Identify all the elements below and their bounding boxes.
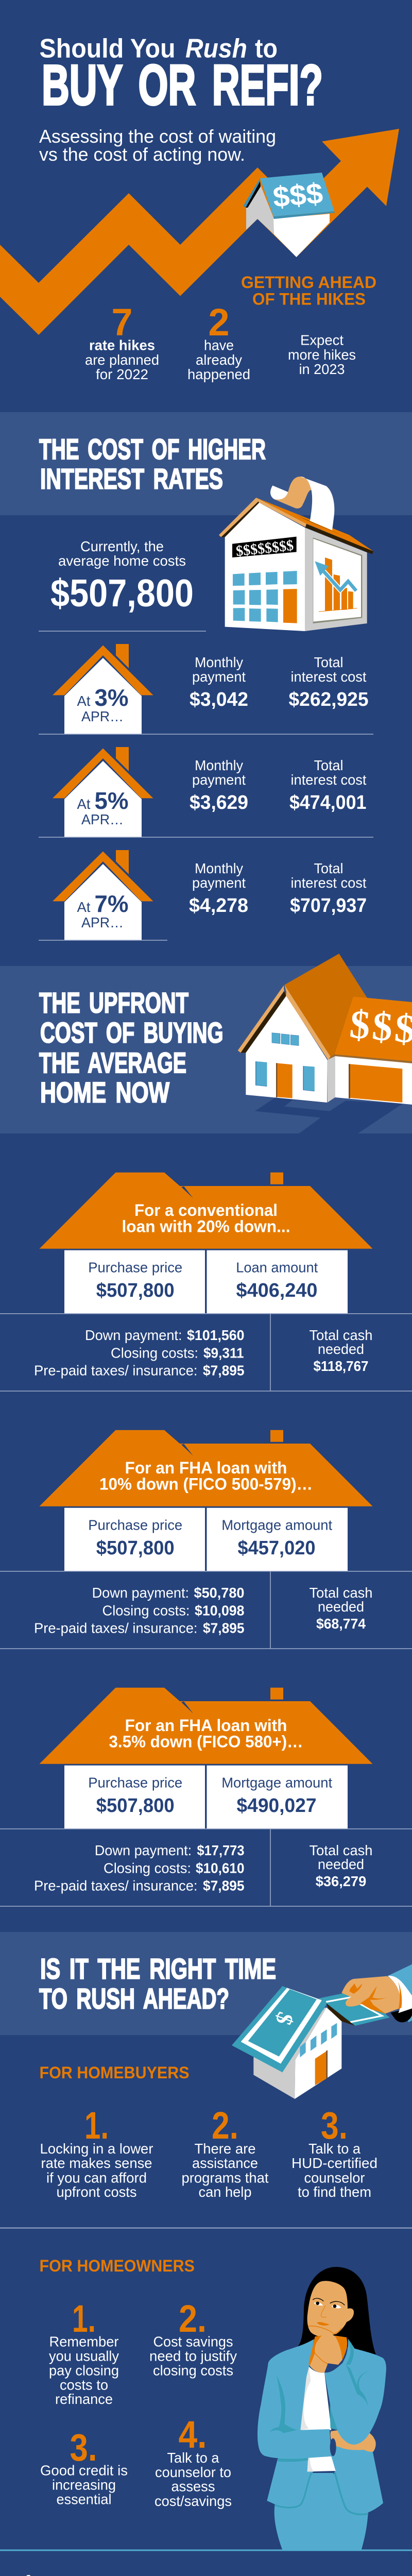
heading: is it the right time to rush ahead: IS IT THE RIGHT TIME	[40, 1953, 276, 1985]
list item: homeowners 2: Cost savings	[153, 2334, 233, 2349]
box: loan amount	[207, 1250, 348, 1314]
text: monthly payment 7%: payment	[192, 875, 246, 891]
stat: expect more hikes: Expect	[300, 332, 344, 348]
list item: homeowners 1: refinance	[55, 2391, 113, 2407]
list item: homebuyers 3: HUD-certified	[291, 2155, 377, 2171]
text: cost breakdown FHA 10%: $50,780	[194, 1585, 244, 1601]
box: purchase price: Purchase price	[88, 1775, 182, 1791]
panel: at 5% APR row	[53, 747, 367, 837]
stat: 2 have already happened: already	[196, 352, 242, 368]
text: total cash needed FHA 3.5%	[309, 1842, 373, 1889]
list item: homeowners 3	[40, 2426, 128, 2507]
text: total interest cost 3%	[288, 654, 369, 710]
list item: homeowners 1: pay closing	[49, 2363, 119, 2379]
list item: homeowners 1: 1.	[72, 2297, 96, 2340]
text: monthly payment 5%	[190, 757, 248, 814]
icon: house with dollar roof on arrow	[243, 173, 335, 257]
text: total cash needed conventional	[309, 1327, 373, 1374]
list item: homeowners 1: you usually	[49, 2348, 119, 2364]
icon: orange roof FHA 3.5%	[39, 1688, 373, 1764]
text: cost breakdown FHA 3.5%: Closing costs:	[104, 1860, 191, 1876]
subheading: for homeowners: FOR HOMEOWNERS	[39, 2257, 195, 2275]
list item: homeowners 4: 4.	[178, 2413, 207, 2456]
box: purchase price: $507,800	[96, 1795, 175, 1817]
heading: is it the right time to rush ahead	[39, 1953, 276, 2014]
icon: orange roof FHA 10%: 10% down (FICO 500-579)…	[99, 1475, 313, 1493]
text: total interest cost 3%: interest cost	[290, 669, 367, 685]
heading: getting ahead of the hikes: OF THE HIKES	[252, 290, 366, 308]
box: loan amount: Loan amount	[236, 1260, 318, 1276]
text: currently the average home costs	[50, 538, 194, 615]
list item: homebuyers 3: to find them	[298, 2184, 371, 2200]
stat: 7 rate hikes: 7	[111, 301, 133, 344]
icon: calculator house with receipt: $$$$$$$$	[235, 537, 295, 560]
text: monthly payment 5%: payment	[192, 772, 246, 788]
text: total interest cost 5%: $474,001	[289, 792, 366, 814]
icon: orange roof conventional: For a conventional	[134, 1201, 278, 1219]
list item: homeowners 1: Remember	[49, 2334, 118, 2349]
list item: homebuyers 1: if you can afford	[46, 2170, 147, 2185]
panel: cost of higher rates heading band	[0, 412, 412, 515]
heading: getting ahead of the hikes	[241, 273, 376, 308]
rising arrow	[0, 129, 399, 335]
list item: homebuyers 2: 2.	[212, 2104, 238, 2147]
list item: homebuyers 1: Locking in a lower	[40, 2141, 153, 2157]
text: cost breakdown FHA 3.5%: Pre-paid taxes/ insurance:	[34, 1878, 198, 1894]
list item: homebuyers 2: can help	[199, 2184, 251, 2200]
text: monthly payment 3%	[190, 654, 248, 710]
list item: homeowners 3: Good credit is	[40, 2463, 128, 2478]
box: loan amount: $406,240	[236, 1280, 317, 1301]
box: mortgage amount	[207, 1766, 348, 1829]
title: Should You Rush to Buy or Refi?: Should You	[39, 34, 175, 64]
text: total cash needed FHA 10%: Total cash	[309, 1585, 373, 1601]
heading: getting ahead of the hikes: GETTING AHEAD	[241, 273, 376, 292]
list item: homeowners 3: 3.	[70, 2426, 97, 2469]
icon: house 3%	[53, 644, 153, 734]
list item: homeowners 2: 2.	[179, 2297, 207, 2340]
text: monthly payment 7%: $4,278	[189, 895, 248, 917]
icon: house 3%: 3%	[95, 684, 129, 711]
text: cost breakdown conventional	[34, 1327, 244, 1379]
stat: 2 have already happened: have	[204, 337, 234, 353]
text: cost breakdown conventional: $7,895	[203, 1363, 244, 1379]
box: purchase price	[64, 1766, 205, 1829]
box: mortgage amount: $457,020	[238, 1537, 315, 1559]
stat: expect more hikes: in 2023	[299, 361, 345, 377]
heading: the upfront cost of buying the average home now: THE AVERAGE	[39, 1046, 186, 1079]
heading: is it the right time to rush ahead: TO RUSH AHEAD?	[39, 1982, 229, 2014]
text: currently the average home costs: Currently, the	[80, 538, 164, 554]
panel: FHA loan 3.5% down	[0, 1688, 412, 1907]
list item: homeowners 2: closing costs	[153, 2363, 233, 2379]
stat: 7 rate hikes: rate hikes	[89, 337, 155, 353]
box: mortgage amount	[207, 1508, 348, 1571]
stat: 7 rate hikes: are planned	[85, 352, 159, 368]
text: cost breakdown conventional: Pre-paid taxes/ insurance:	[34, 1363, 198, 1379]
stat: expect more hikes	[288, 332, 356, 377]
panel: at 7% APR row	[53, 850, 367, 940]
text: total cash needed conventional: $118,767	[313, 1358, 369, 1374]
text: cost breakdown FHA 10%: $7,895	[203, 1620, 244, 1636]
list item: homeowners 3: essential	[57, 2492, 111, 2507]
heading: the upfront cost of buying the average home now: THE UPFRONT	[39, 986, 188, 1019]
text: cost breakdown FHA 3.5%: Down payment:	[95, 1842, 192, 1858]
box: purchase price: Purchase price	[88, 1517, 182, 1533]
list item: homeowners 4: assess	[171, 2479, 215, 2495]
text: total cash needed FHA 10%	[309, 1585, 373, 1632]
title: Should You Rush to Buy or Refi?: to	[255, 34, 278, 64]
list item: homeowners 3: increasing	[52, 2477, 116, 2493]
panel: at 3% APR row	[53, 644, 369, 734]
text: monthly payment 7%	[189, 860, 248, 917]
text: total interest cost 7%: Total	[314, 860, 343, 876]
icon: house 7%: APR…	[81, 914, 124, 930]
text: total cash needed FHA 10%: needed	[318, 1599, 364, 1615]
list item: homebuyers 1	[40, 2104, 153, 2200]
subtitle	[39, 126, 276, 165]
text: total interest cost 5%: interest cost	[290, 772, 367, 788]
list item: homebuyers 1: 1.	[84, 2104, 109, 2147]
stat: 2 have already happened: happened	[187, 366, 250, 382]
heading: the upfront cost of buying the average home now	[39, 986, 224, 1109]
icon: house with dollar roof on arrow: $$$	[271, 177, 324, 213]
text: cost breakdown FHA 10%: Pre-paid taxes/ insurance:	[34, 1620, 198, 1636]
panel: FHA loan 10% down	[0, 1430, 412, 1649]
text: total interest cost 7%: interest cost	[290, 875, 367, 891]
box: mortgage amount: Mortgage amount	[221, 1775, 332, 1791]
text: currently the average home costs: average home costs	[58, 553, 186, 569]
icon: house 7%	[53, 850, 153, 940]
heading: the cost of higher interest rates	[39, 433, 266, 495]
text: total cash needed FHA 10%: $68,774	[316, 1616, 366, 1632]
stat: 2 have already happened	[187, 301, 250, 382]
icon: hand lifting money roof from house	[232, 1964, 412, 2099]
icon: orange roof FHA 10%: For an FHA loan with	[125, 1459, 287, 1477]
panel: right time heading band	[0, 1932, 412, 2035]
icon: hand lifting money roof from house: $	[270, 2009, 299, 2028]
text: total cash needed conventional: needed	[318, 1341, 364, 1357]
list item: homebuyers 3: counselor	[304, 2170, 365, 2185]
title: Should You Rush to Buy or Refi?	[39, 34, 323, 117]
text: monthly payment 3%: payment	[192, 669, 246, 685]
text: total interest cost 7%: $707,937	[290, 895, 367, 917]
text: cost breakdown FHA 10%: Down payment:	[92, 1585, 189, 1601]
list item: homeowners 4: Talk to a	[167, 2450, 219, 2466]
icon: house 5%: At	[77, 796, 91, 812]
text: total cash needed FHA 3.5%: needed	[318, 1856, 364, 1872]
list item: homebuyers 3	[291, 2104, 377, 2200]
heading: the cost of higher interest rates: INTEREST RATES	[40, 463, 223, 495]
icon: house 3%: APR…	[81, 708, 124, 724]
text: cost breakdown FHA 3.5%: $17,773	[197, 1842, 244, 1858]
text: cost breakdown FHA 3.5%: $10,610	[196, 1860, 244, 1876]
stat: expect more hikes: more hikes	[288, 347, 356, 363]
text: total cash needed FHA 3.5%: Total cash	[309, 1842, 373, 1858]
text: cost breakdown conventional: Closing costs:	[111, 1345, 198, 1361]
stat: 2 have already happened: 2	[208, 301, 230, 344]
text: total interest cost 5%	[289, 757, 367, 814]
text: total interest cost 5%: Total	[314, 757, 343, 773]
text: cost breakdown conventional: $9,311	[203, 1345, 244, 1361]
icon: house 5%	[53, 747, 153, 837]
box: mortgage amount: Mortgage amount	[221, 1517, 332, 1533]
list item: homeowners 2	[149, 2297, 237, 2379]
box: purchase price	[64, 1508, 205, 1571]
icon: orange roof FHA 3.5%: For an FHA loan with	[125, 1716, 287, 1735]
list item: homeowners 1: costs to	[60, 2377, 108, 2393]
panel: upfront cost heading band	[0, 966, 412, 1133]
list item: homebuyers 2: programs that	[181, 2170, 269, 2185]
list item: homebuyers 1: rate makes sense	[41, 2155, 152, 2171]
text: cost breakdown FHA 10%	[34, 1585, 244, 1636]
list item: homebuyers 2	[181, 2104, 269, 2200]
text: total cash needed FHA 3.5%: $36,279	[316, 1873, 366, 1889]
list item: homebuyers 3: 3.	[321, 2104, 348, 2147]
text: cost breakdown conventional: Down payment:	[85, 1327, 182, 1343]
list item: homeowners 2: need to justify	[149, 2348, 237, 2364]
list item: homeowners 4: counselor to	[155, 2464, 231, 2480]
icon: large house with garage	[238, 954, 412, 1133]
box: purchase price: $507,800	[96, 1537, 175, 1559]
box: purchase price: Purchase price	[88, 1260, 182, 1276]
heading: the upfront cost of buying the average home now: COST OF BUYING	[40, 1016, 224, 1049]
list item: homebuyers 2: assistance	[192, 2155, 258, 2171]
icon: calculator house with receipt	[219, 477, 373, 631]
list item: homeowners 1	[49, 2297, 119, 2407]
box: purchase price: $507,800	[96, 1280, 175, 1301]
heading: the upfront cost of buying the average home now: HOME NOW	[40, 1076, 169, 1109]
list item: homebuyers 3: Talk to a	[308, 2141, 360, 2157]
illustration: thinking woman in blue suit	[258, 2267, 386, 2550]
box: purchase price	[64, 1250, 205, 1314]
heading: the cost of higher interest rates: THE COST OF HIGHER	[39, 433, 266, 465]
list item: homeowners 4	[154, 2413, 232, 2509]
text: monthly payment 3%: Monthly	[195, 654, 243, 670]
text: currently the average home costs: $507,800	[50, 571, 194, 615]
box: mortgage amount: $490,027	[237, 1795, 316, 1817]
subtitle: vs the cost of acting now.	[39, 144, 245, 165]
text: monthly payment 5%: $3,629	[190, 792, 248, 814]
icon: orange roof conventional: loan with 20% down...	[122, 1217, 290, 1235]
icon: house 3%: At	[77, 693, 91, 709]
icon: house 5%: APR…	[81, 811, 124, 827]
text: cost breakdown conventional: $101,560	[187, 1327, 244, 1343]
subheading: for homebuyers: FOR HOMEBUYERS	[39, 2063, 190, 2082]
icon: house 5%: 5%	[95, 787, 129, 814]
title: Should You Rush to Buy or Refi?: Rush	[185, 34, 247, 64]
stat: 7 rate hikes	[85, 301, 159, 382]
icon: orange roof FHA 10%	[39, 1430, 373, 1506]
text: cost breakdown FHA 3.5%: $7,895	[203, 1878, 244, 1894]
icon: house 7%: At	[77, 899, 91, 915]
text: total interest cost 7%	[290, 860, 367, 917]
list item: homebuyers 2: There are	[195, 2141, 255, 2157]
text: total interest cost 3%: Total	[314, 654, 343, 670]
icon: house 7%: 7%	[95, 890, 129, 917]
icon: orange roof FHA 3.5%: 3.5% down (FICO 580+)…	[109, 1732, 303, 1751]
subtitle: Assessing the cost of waiting	[39, 126, 276, 147]
text: cost breakdown FHA 3.5%	[34, 1842, 244, 1894]
panel: conventional loan 20% down	[0, 1173, 412, 1392]
text: total interest cost 3%: $262,925	[288, 689, 369, 710]
text: monthly payment 7%: Monthly	[195, 860, 243, 876]
list item: homebuyers 1: upfront costs	[57, 2184, 137, 2200]
stat: 7 rate hikes: for 2022	[96, 366, 148, 382]
text: monthly payment 5%: Monthly	[195, 757, 243, 773]
text: cost breakdown FHA 10%: Closing costs:	[102, 1602, 190, 1618]
icon: orange roof conventional	[39, 1173, 373, 1249]
text: cost breakdown FHA 10%: $10,098	[195, 1602, 244, 1618]
list item: homeowners 4: cost/savings	[154, 2493, 232, 2509]
text: total cash needed conventional: Total cash	[309, 1327, 373, 1343]
text: monthly payment 3%: $3,042	[190, 689, 248, 710]
